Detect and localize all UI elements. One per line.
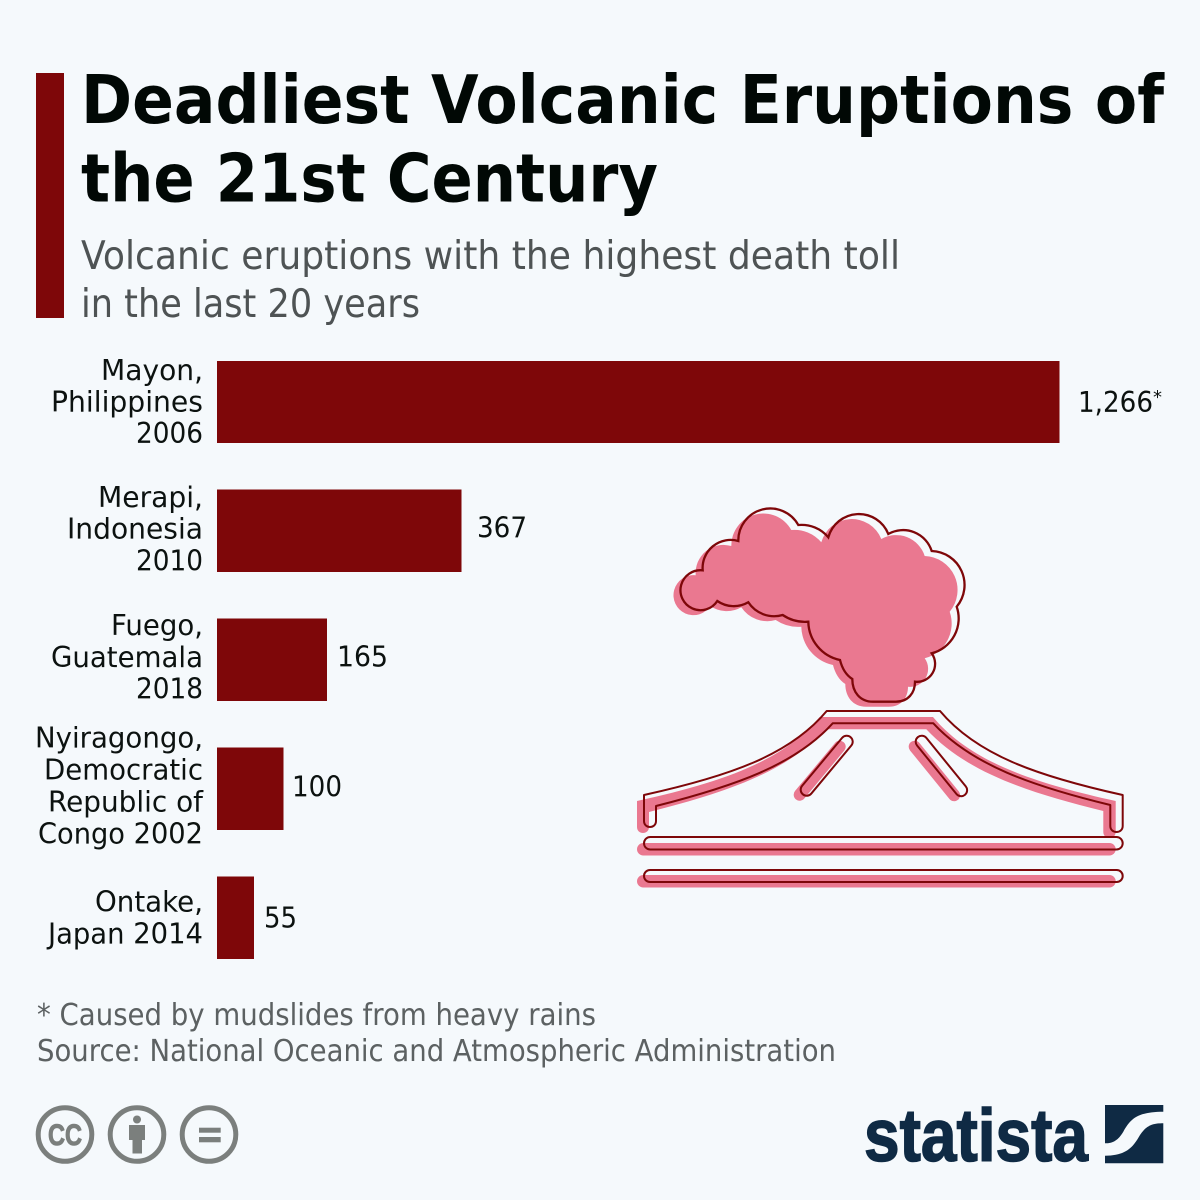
row: Fuego: [51, 609, 388, 706]
icon: attribution: [110, 1108, 164, 1161]
row: Merapi: Merapi,: [98, 481, 203, 514]
ground line upper: [637, 837, 1123, 856]
subtitle: [81, 234, 900, 327]
footnote and source: [37, 998, 836, 1069]
bar chart: [35, 354, 1162, 959]
logo mark: [1105, 1105, 1163, 1163]
icon: creative commons: CC: [48, 1119, 82, 1152]
smoke cloud: [673, 508, 965, 707]
row: Nyiragongo: 100: [292, 770, 342, 804]
row: Mayon: Mayon,: [101, 354, 203, 387]
row: Fuego: 2018: [136, 672, 203, 706]
row: Mayon: 2006: [136, 417, 203, 450]
row: Merapi: 367: [477, 512, 527, 544]
row: Ontake: [46, 876, 297, 959]
subtitle: Volcanic eruptions with the highest death toll: [81, 234, 900, 279]
lava streak right: [906, 733, 970, 804]
row: Merapi: Indonesia: [67, 512, 203, 546]
title: the 21st Century: [81, 140, 658, 218]
row: Nyiragongo: Democratic: [44, 754, 203, 786]
subtitle: in the last 20 years: [81, 282, 420, 327]
row: Merapi: [67, 481, 527, 578]
row: Mayon: [51, 354, 1162, 450]
row: Nyiragongo: Nyiragongo,: [35, 722, 203, 754]
row: Ontake: 55: [264, 902, 297, 934]
title: [81, 61, 1165, 218]
header accent bar: [36, 73, 64, 318]
row: Fuego: Fuego,: [111, 609, 203, 642]
icon: no derivatives: [182, 1108, 236, 1161]
footnote and source: * Caused by mudslides from heavy rains: [37, 998, 596, 1033]
row: Nyiragongo: [35, 722, 342, 850]
row: Mayon: 1,266: [1078, 386, 1153, 419]
statista logo: statista: [864, 1094, 1089, 1177]
footnote and source: Source: National Oceanic and Atmospheric Administration: [37, 1034, 836, 1069]
icon: volcano illustration: [637, 508, 1123, 888]
row: Nyiragongo: Congo 2002: [38, 818, 203, 850]
row: Ontake: Japan 2014: [46, 918, 203, 950]
row: Fuego: 165: [337, 640, 388, 674]
lava streak left: [791, 733, 855, 803]
ground line lower: [637, 870, 1123, 888]
row: Nyiragongo: Republic of: [48, 786, 204, 818]
row: Mayon: Philippines: [51, 386, 203, 418]
icon: creative commons: [38, 1108, 92, 1161]
volcano cone: [637, 711, 1123, 838]
row: Mayon: *: [1153, 387, 1162, 408]
row: Fuego: Guatemala: [51, 641, 203, 674]
row: Merapi: 2010: [136, 544, 203, 578]
row: Ontake: Ontake,: [95, 886, 203, 918]
